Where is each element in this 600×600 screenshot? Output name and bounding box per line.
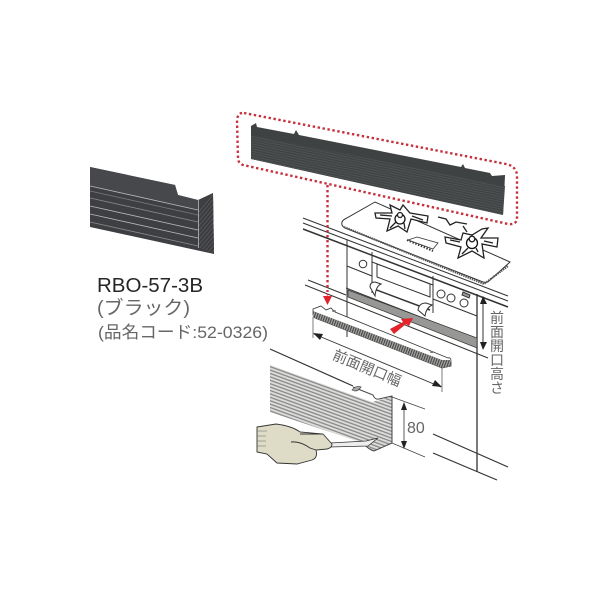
oven door details [359, 260, 470, 316]
ribbed lower panel [270, 365, 392, 451]
model number: RBO-57-3B [97, 275, 203, 297]
door handle [374, 289, 430, 310]
control plate [408, 237, 438, 249]
knob at left panel [359, 260, 367, 268]
width dimension [313, 317, 442, 392]
oven window [377, 264, 430, 297]
product name and code [97, 275, 268, 342]
main product: trim bar [251, 123, 505, 215]
cooktop [342, 202, 510, 284]
dimension value: 80 [407, 420, 425, 437]
icon: gloved hand with tool [257, 424, 378, 464]
colour name: (ブラック) [97, 296, 190, 319]
counter and cabinet outline [270, 218, 508, 480]
red drop arrow [323, 290, 332, 305]
control knobs [437, 290, 445, 298]
height label: さ [490, 380, 504, 396]
width label: 前面開口幅 [330, 347, 404, 390]
icon: right burner [438, 217, 498, 258]
icon: left burner [375, 205, 428, 232]
red insert arrow [390, 318, 413, 334]
height label: 開 [490, 338, 504, 354]
80 mm dimension [392, 397, 425, 457]
height dimension [480, 296, 504, 396]
red dotted callout outline [237, 113, 517, 292]
height label [490, 310, 504, 396]
height label: 高 [490, 366, 504, 382]
height label: 前 [490, 310, 504, 326]
grey opening strip [348, 290, 477, 348]
product close-up: black trim end [90, 167, 214, 254]
height label: 面 [490, 324, 504, 340]
height label: 口 [490, 352, 504, 368]
product code: (品名コード:52-0326) [98, 323, 268, 342]
removable trim strip [313, 306, 451, 368]
